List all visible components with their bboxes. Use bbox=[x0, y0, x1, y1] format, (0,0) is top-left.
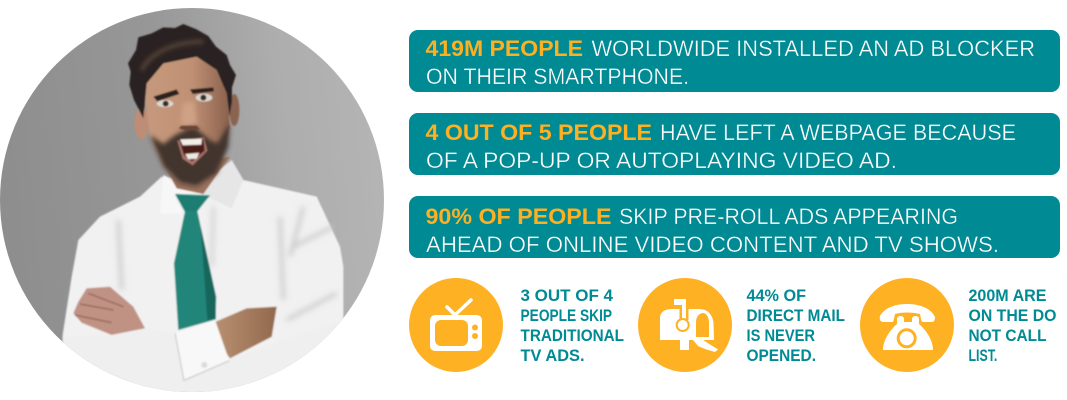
tie bbox=[175, 194, 210, 212]
text: do not call list: LIST. bbox=[968, 347, 997, 366]
text: direct mail: 44% OF bbox=[746, 287, 806, 305]
text: do not call list: ON THE DO bbox=[968, 307, 1057, 325]
text: traditional TV ads: PEOPLE SKIP bbox=[520, 307, 612, 325]
icon: television bbox=[409, 278, 503, 372]
face bbox=[145, 57, 230, 187]
panel: ad blocker statistic bbox=[409, 30, 1060, 92]
text: traditional TV ads bbox=[520, 287, 624, 365]
text: do not call list: NOT CALL bbox=[968, 327, 1046, 345]
photo: frustrated man with crossed arms bbox=[0, 0, 397, 397]
text: traditional TV ads: TV ADS. bbox=[520, 347, 584, 365]
nose highlight bbox=[181, 102, 197, 125]
mouth bbox=[177, 137, 207, 165]
text: traditional TV ads: TRADITIONAL bbox=[520, 327, 624, 345]
text: direct mail: IS NEVER bbox=[746, 327, 815, 345]
text: second line: ON THEIR SMARTPHONE. bbox=[426, 64, 689, 89]
text: first line: WORLDWIDE INSTALLED AN AD BLOCKER bbox=[592, 36, 1035, 61]
text: first line: HAVE LEFT A WEBPAGE BECAUSE bbox=[660, 120, 1016, 145]
text: direct mail bbox=[746, 287, 845, 365]
hand left bbox=[73, 287, 145, 335]
brows bbox=[153, 89, 179, 101]
panel: pre-roll statistic bbox=[409, 196, 1060, 258]
icon: mailbox bbox=[638, 278, 732, 372]
text: traditional TV ads: 3 OUT OF 4 bbox=[520, 287, 614, 305]
beard bbox=[150, 123, 230, 187]
text: do not call list: 200M ARE bbox=[968, 287, 1046, 305]
collar bbox=[162, 174, 172, 180]
highlight: 90% of people: 90% OF PEOPLE bbox=[426, 204, 612, 229]
sleeve lower bbox=[62, 320, 347, 397]
text: do not call list bbox=[968, 287, 1057, 366]
highlight: 4 out of 5 people: 4 OUT OF 5 PEOPLE bbox=[426, 120, 652, 145]
eyes bbox=[157, 100, 173, 107]
hair bbox=[128, 24, 236, 118]
text: second line: OF A POP-UP OR AUTOPLAYING VIDEO AD. bbox=[426, 148, 897, 173]
text: direct mail: DIRECT MAIL bbox=[746, 307, 845, 325]
highlight: 419M people: 419M PEOPLE bbox=[426, 36, 583, 61]
forearm right bbox=[216, 307, 277, 358]
icon: telephone bbox=[860, 278, 954, 372]
neck bbox=[167, 157, 230, 194]
text: direct mail: OPENED. bbox=[746, 347, 816, 365]
ears bbox=[134, 107, 149, 139]
shirt bbox=[62, 161, 344, 360]
panel: pop-up statistic bbox=[409, 113, 1060, 175]
text: first line: SKIP PRE-ROLL ADS APPEARING bbox=[619, 204, 958, 229]
text: second line: AHEAD OF ONLINE VIDEO CONTENT AND TV SHOWS. bbox=[426, 232, 999, 257]
